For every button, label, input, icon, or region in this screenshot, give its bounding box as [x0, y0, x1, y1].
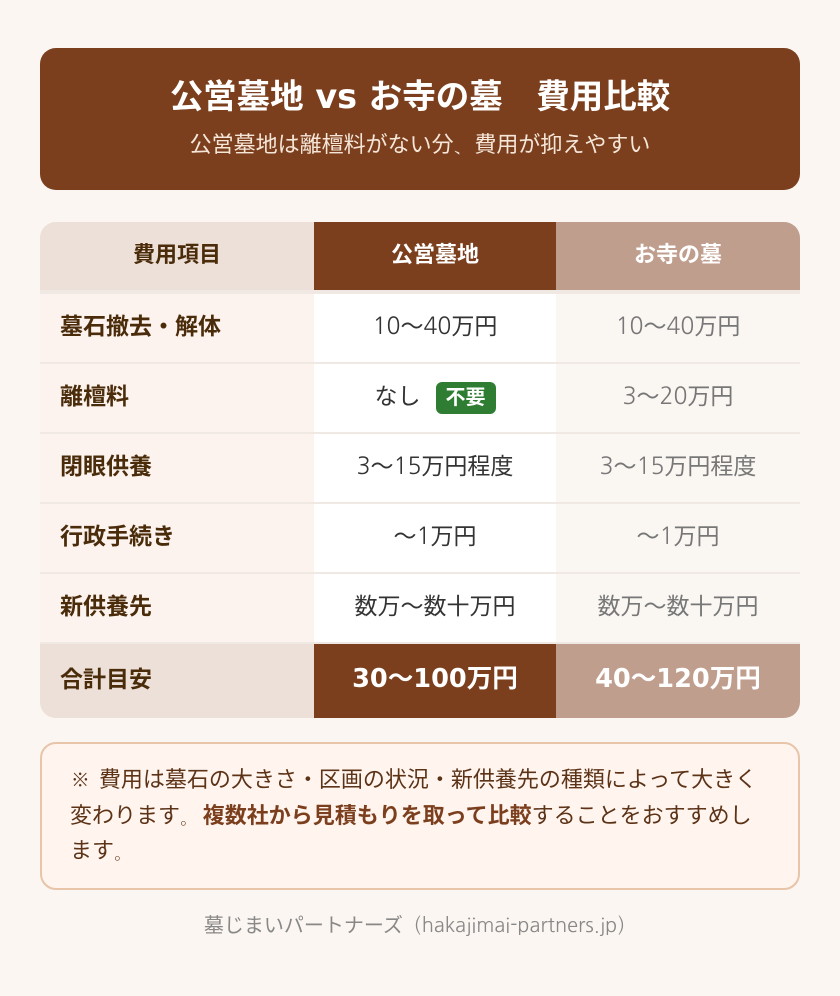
row: admin public: 〜1万円: [394, 525, 476, 548]
row: new site label: [40, 574, 314, 642]
total label: 合計目安: [60, 660, 152, 694]
row: new site temple: 数万〜数十万円: [598, 595, 758, 618]
table header: public cemetery: [314, 222, 556, 290]
row: leaving fee label: [40, 364, 314, 432]
footer source: 墓じまいパートナーズ（hakajimai-partners.jp）: [204, 914, 636, 934]
row: eye-closing temple: 3〜15万円程度: [600, 455, 756, 478]
total public: 30〜100万円: [352, 664, 518, 694]
table header: public cemetery: 公営墓地: [391, 237, 479, 269]
title: 公営墓地 vs お寺の墓 費用比較: [170, 76, 670, 116]
row: eye-closing label: [40, 434, 314, 502]
row: admin temple: 〜1万円: [637, 525, 719, 548]
note box: ※ 費用は墓石の大きさ・区画の状況・新供養先の種類によって大きく変わります。複数社から見積もりを取って比較することをおすすめします。: [70, 769, 757, 862]
total temple: 40〜120万円: [595, 664, 761, 694]
header banner: [40, 48, 800, 190]
row: new site public: [314, 574, 556, 642]
row: eye-closing label: 閉眼供養: [60, 446, 152, 480]
table header: temple grave: お寺の墓: [634, 237, 722, 269]
table header: item column: [40, 222, 314, 290]
row: leaving fee public: なし: [374, 385, 420, 408]
row: new site temple: [556, 574, 800, 642]
row: removal public: 10〜40万円: [373, 315, 497, 338]
table header: temple grave: [556, 222, 800, 290]
row: removal temple: [556, 294, 800, 362]
row: leaving fee public: 不要: [446, 381, 486, 410]
row: removal label: [40, 294, 314, 362]
total label: [40, 644, 314, 718]
row: admin temple: [556, 504, 800, 572]
total public: [314, 644, 556, 718]
row: admin label: [40, 504, 314, 572]
row: removal temple: 10〜40万円: [616, 315, 740, 338]
subtitle: 公営墓地は離檀料がない分、費用が抑えやすい: [190, 134, 650, 156]
comparison table: [40, 222, 800, 718]
row: removal label: 墓石撤去・解体: [60, 306, 221, 340]
table header: item column: 費用項目: [133, 237, 221, 269]
row: eye-closing temple: [556, 434, 800, 502]
row: leaving fee temple: 3〜20万円: [623, 385, 733, 408]
row: new site public: 数万〜数十万円: [354, 595, 516, 618]
row: leaving fee label: 離檀料: [60, 376, 129, 410]
total temple: [556, 644, 800, 718]
note box: [40, 742, 800, 890]
row: removal public: [314, 294, 556, 362]
row: eye-closing public: [314, 434, 556, 502]
row: leaving fee temple: [556, 364, 800, 432]
row: eye-closing public: 3〜15万円程度: [357, 455, 513, 478]
row: admin public: [314, 504, 556, 572]
row: admin label: 行政手続き: [60, 516, 175, 550]
row: leaving fee public: [314, 364, 556, 432]
row: new site label: 新供養先: [60, 586, 152, 620]
